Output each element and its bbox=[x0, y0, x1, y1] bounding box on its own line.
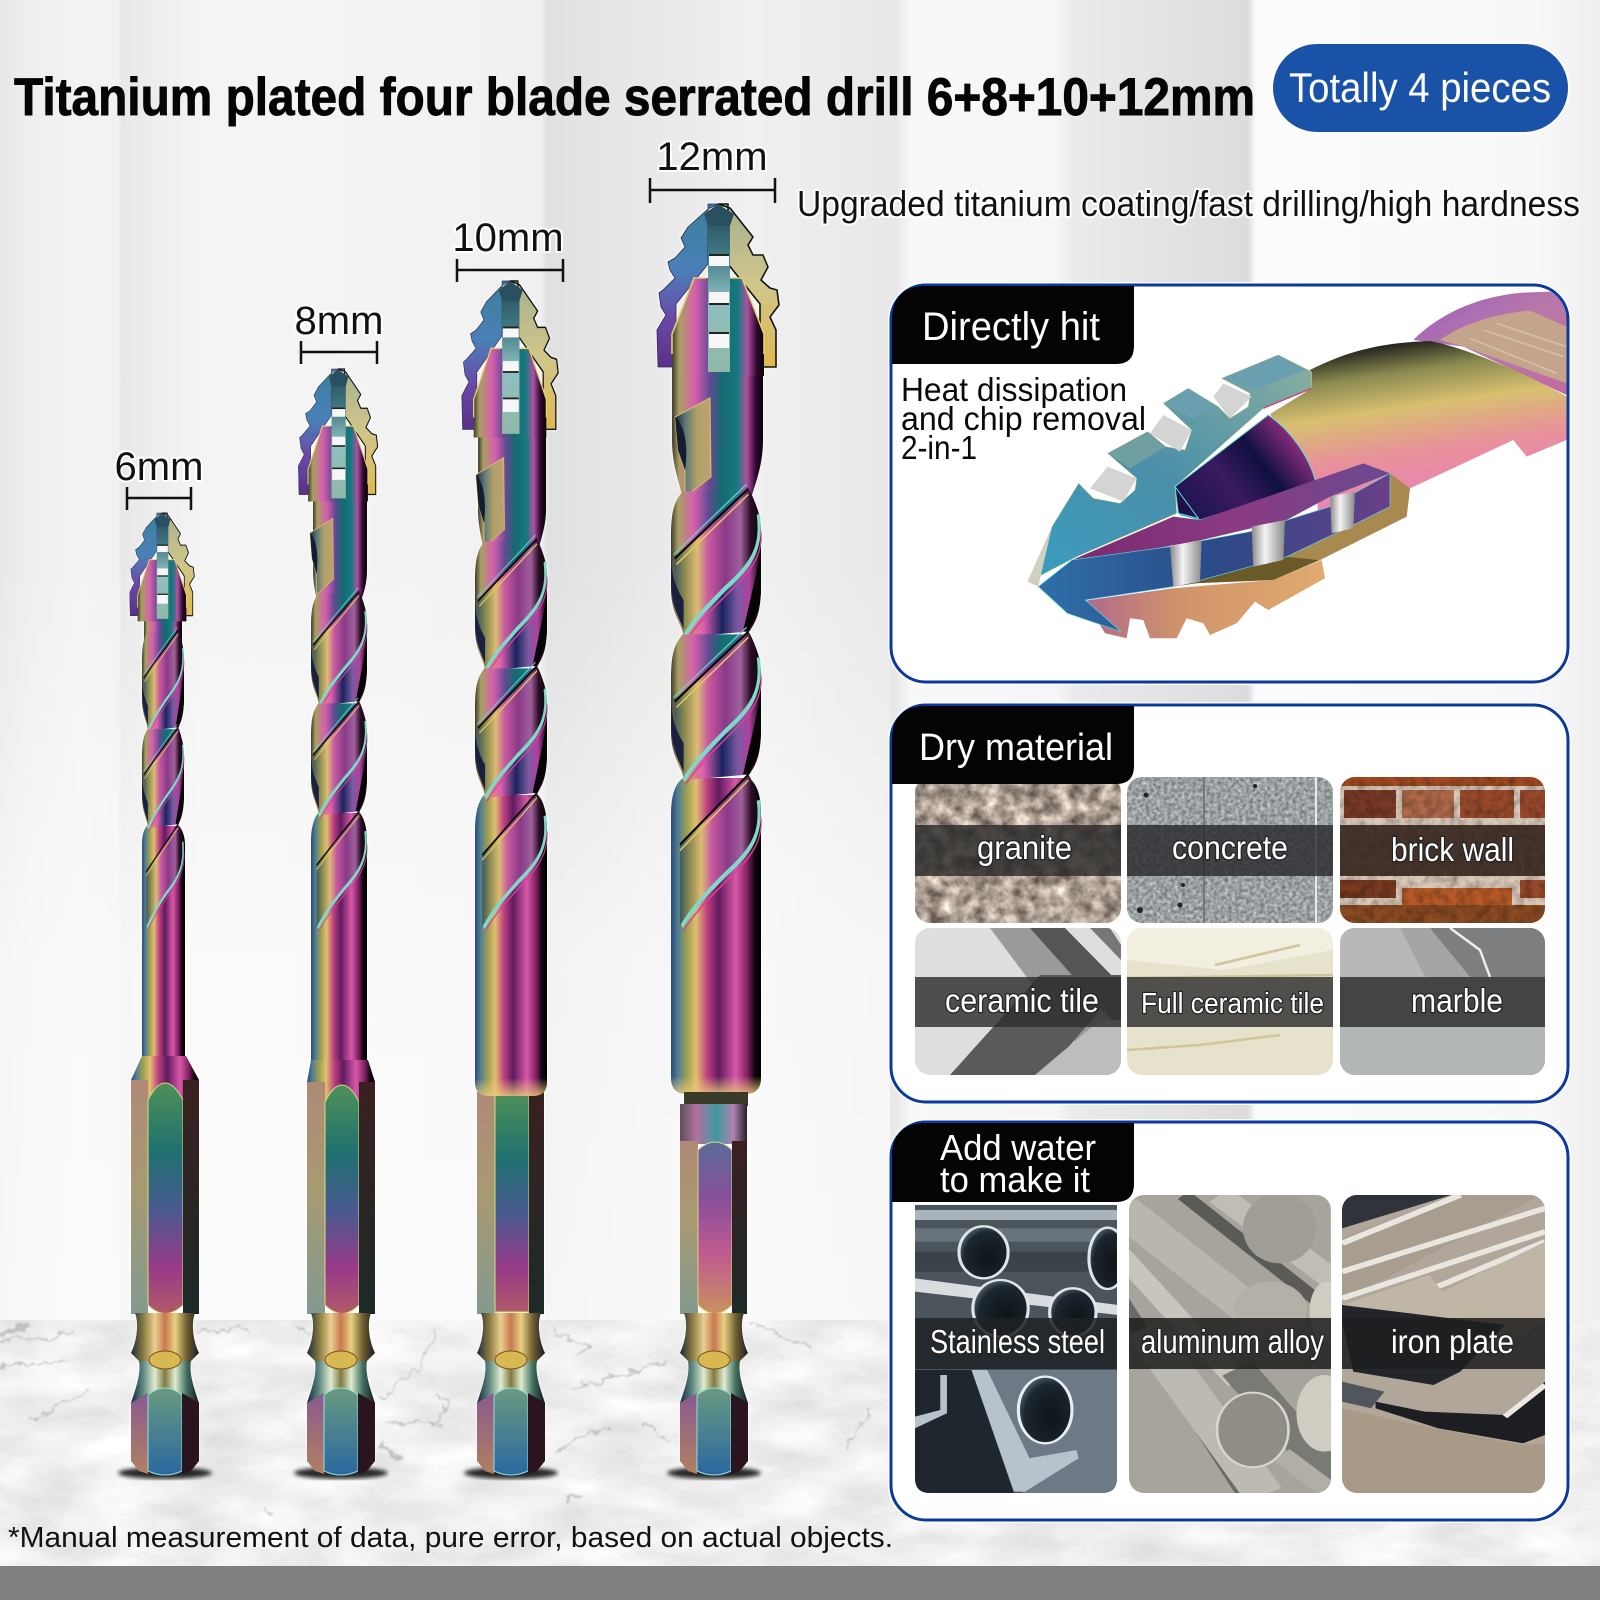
tile: granite bbox=[915, 777, 1121, 923]
panel tab: add water to make it: to make it bbox=[940, 1159, 1090, 1200]
panel tab: dry material: Dry material bbox=[919, 727, 1113, 769]
tile: ceramic tile: ceramic tile bbox=[945, 982, 1099, 1019]
tile: iron plate: iron plate bbox=[1391, 1323, 1514, 1360]
bottom grey band bbox=[0, 1566, 1600, 1600]
drill bit 12mm bbox=[657, 204, 779, 1479]
tile: granite: granite bbox=[977, 829, 1072, 866]
tile: brick wall bbox=[1340, 777, 1545, 923]
badge: totally 4 pieces bbox=[1272, 43, 1569, 133]
size label 6mm bbox=[115, 445, 203, 510]
drill bit 6mm bbox=[118, 513, 212, 1479]
size label 10mm bbox=[452, 216, 564, 282]
panel: dry material bbox=[888, 702, 1571, 1105]
footnote: *Manual measurement of data, pure error, based on actual objects. bbox=[8, 1522, 893, 1554]
panel: directly hit bbox=[888, 282, 1571, 685]
size label 8mm bbox=[295, 299, 383, 364]
size label 8mm: 8mm bbox=[295, 299, 383, 343]
tile: concrete: concrete bbox=[1172, 829, 1288, 866]
text: heat dissipation: Heat dissipation bbox=[901, 371, 1127, 408]
panel tab: add water to make it: Add water bbox=[940, 1127, 1096, 1168]
size label 10mm: 10mm bbox=[452, 216, 564, 260]
tile: aluminum alloy bbox=[1129, 1195, 1331, 1493]
tile: aluminum alloy: aluminum alloy bbox=[1141, 1323, 1324, 1360]
title: Titanium plated four blade serrated drill 6+8+10+12mm bbox=[14, 68, 1255, 127]
text: heat dissipation bbox=[901, 371, 1146, 466]
drill bit 10mm bbox=[462, 281, 558, 1479]
panel tab: directly hit bbox=[892, 286, 1134, 364]
panel tab: dry material bbox=[892, 706, 1134, 784]
marble floor bbox=[0, 1320, 1600, 1566]
tile: iron plate bbox=[1342, 1195, 1545, 1493]
tile: concrete bbox=[1127, 777, 1333, 923]
panel: add water to make it bbox=[888, 1119, 1571, 1523]
size label 12mm: 12mm bbox=[656, 135, 768, 179]
text: heat dissipation: and chip removal bbox=[901, 400, 1146, 437]
tile: ceramic tile bbox=[915, 928, 1121, 1075]
panel tab: directly hit: Directly hit bbox=[922, 305, 1100, 349]
tile: marble bbox=[1340, 928, 1545, 1075]
panel border: directly hit bbox=[891, 285, 1568, 682]
tile: full ceramic tile: Full ceramic tile bbox=[1141, 988, 1324, 1020]
size label 12mm bbox=[650, 135, 775, 203]
tile: stainless steel: Stainless steel bbox=[930, 1323, 1105, 1360]
drill bit 8mm bbox=[294, 369, 388, 1479]
text: heat dissipation: 2-in-1 bbox=[901, 429, 977, 466]
tile: stainless steel bbox=[915, 1205, 1126, 1493]
size label 6mm: 6mm bbox=[115, 445, 203, 489]
badge: totally 4 pieces: Totally 4 pieces bbox=[1289, 64, 1551, 111]
tile: marble: marble bbox=[1411, 982, 1503, 1019]
tile: full ceramic tile bbox=[1127, 928, 1333, 1075]
tile: brick wall: brick wall bbox=[1391, 831, 1514, 868]
panel tab: add water to make it bbox=[892, 1123, 1134, 1202]
illustration: drill tip closeup bbox=[1027, 292, 1567, 638]
